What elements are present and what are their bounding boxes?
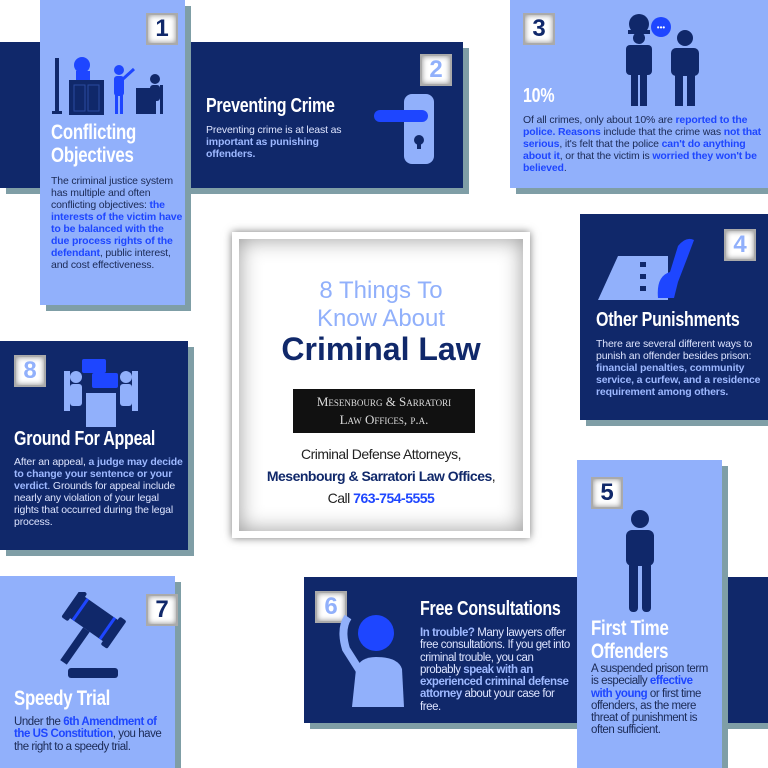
- number 3: [523, 13, 555, 45]
- title: Know About: [317, 305, 445, 332]
- heading: ground for appeal: Ground For Appeal: [14, 428, 155, 450]
- heading: 10%: 10%: [523, 85, 554, 107]
- icon: police and person: [626, 14, 699, 106]
- text: first time offenders: A suspended prison term is especially effective with young or first time offenders, as the mere threat of punishment is often sufficient.: [591, 663, 708, 736]
- text: other punishments: There are several different ways to punish an offender besides prison: financial penalties, community service, a curfew, and a residence requirement among others.: [596, 338, 760, 398]
- title: [317, 277, 445, 332]
- icon: door handle: [374, 94, 434, 164]
- icon: meeting: [64, 359, 138, 427]
- number 6: 6: [324, 593, 338, 620]
- heading: first time offenders: First Time: [591, 617, 669, 640]
- icon: courtroom: [52, 57, 163, 115]
- contact text: Call 763-754-5555: [328, 490, 434, 506]
- number 1: [146, 13, 178, 45]
- heading: preventing crime: Preventing Crime: [206, 95, 335, 117]
- text: conflicting objectives: The criminal justice system has multiple and often conflicting objectives: the interests of the victim have to be balanced with the due process rights of the defendant, public interest, and cost effectiveness.: [51, 175, 182, 271]
- number 6: [315, 591, 347, 623]
- icon: road worker: [598, 238, 694, 300]
- panel 7: speedy trial: [0, 576, 175, 768]
- contact text: Criminal Defense Attorneys,: [301, 446, 461, 462]
- logo: Mesenbourg & Sarratori: [317, 394, 451, 409]
- icon: gavel: [60, 592, 126, 678]
- number 2: 2: [429, 56, 443, 83]
- number 8: 8: [23, 357, 37, 384]
- panel 6: free consultations: [304, 577, 768, 723]
- panel 3: 10%: [510, 0, 768, 188]
- contact text: [267, 446, 495, 506]
- icon: person on phone: [339, 614, 404, 707]
- panel 1: conflicting objectives: [40, 0, 185, 305]
- number 1: 1: [155, 15, 169, 42]
- text: speedy trial: Under the 6th Amendment of the US Constitution, you have the right to a speedy trial.: [14, 716, 161, 753]
- heading: speedy trial: Speedy Trial: [14, 687, 110, 710]
- number 7: [146, 594, 178, 626]
- number 8: [14, 355, 46, 387]
- number 3: 3: [532, 15, 546, 42]
- center title box: [232, 232, 530, 538]
- number 5: 5: [600, 479, 614, 506]
- number 4: [724, 229, 756, 261]
- number 2: [420, 54, 452, 86]
- icon: police and person: •••: [657, 23, 665, 32]
- heading: first time offenders: [591, 617, 669, 663]
- center title box: Criminal Law: [281, 331, 481, 367]
- icon: standing person: [626, 510, 654, 612]
- panel 8: ground for appeal: [0, 341, 188, 550]
- text: ground for appeal: After an appeal, a judge may decide to change your sentence or your verdict. Grounds for appeal include nearly any violation of your legal rights that occurred during the legal process.: [14, 456, 183, 528]
- panel 2: preventing crime: [0, 42, 463, 188]
- number 5: [591, 477, 623, 509]
- contact text: Mesenbourg & Sarratori Law Offices,: [267, 468, 495, 484]
- heading: conflicting objectives: [51, 121, 136, 167]
- logo: [293, 389, 475, 433]
- number 7: 7: [155, 596, 169, 623]
- text: preventing crime: Preventing crime is at least as important as punishing offenders.: [206, 124, 341, 160]
- heading: free consultations: Free Consultations: [420, 598, 561, 620]
- title: 8 Things To: [319, 277, 443, 304]
- panel 5: first time offenders: [577, 460, 722, 768]
- panel 4: other punishments: [580, 214, 768, 420]
- logo: Law Offices, p.a.: [340, 412, 428, 427]
- heading: conflicting objectives: Objectives: [51, 144, 134, 167]
- text: 10%: Of all crimes, only about 10% are reported to the police. Reasons include that the crime was not that serious, it's felt that the police can't do anything about it, or that the victim is worried they won't be believed.: [523, 114, 761, 174]
- heading: conflicting objectives: Conflicting: [51, 121, 136, 144]
- number 4: 4: [733, 231, 747, 258]
- heading: other punishments: Other Punishments: [596, 309, 740, 331]
- text: free consultations: In trouble? Many lawyers offer free consultations. If you get into criminal trouble, you can probably speak with an experienced criminal defense attorney about your case for free.: [420, 627, 570, 713]
- heading: first time offenders: Offenders: [591, 640, 668, 663]
